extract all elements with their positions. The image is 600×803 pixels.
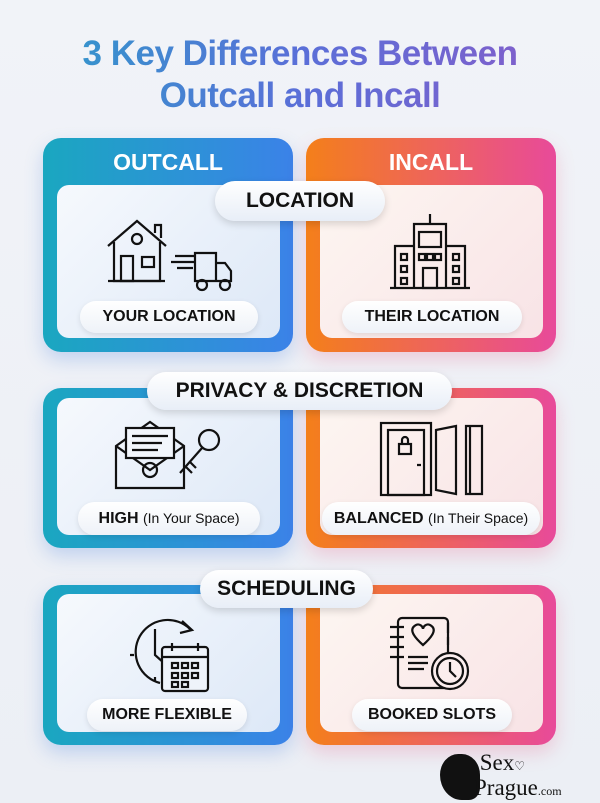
label: your location: YOUR LOCATION bbox=[102, 308, 236, 325]
panel: outcall location bbox=[43, 138, 293, 352]
icon: house and truck bbox=[107, 220, 232, 292]
pill: scheduling: SCHEDULING bbox=[217, 577, 356, 600]
panel: outcall privacy bbox=[43, 388, 293, 548]
pill: location: LOCATION bbox=[246, 189, 354, 212]
panel: incall privacy bbox=[306, 388, 556, 548]
label: your location bbox=[80, 301, 258, 333]
icon: doors bbox=[380, 422, 484, 496]
pill: scheduling bbox=[200, 570, 373, 608]
icon: notebook and clock bbox=[390, 616, 470, 690]
inner card bbox=[320, 594, 543, 732]
label: more flexible bbox=[87, 699, 247, 731]
title: 3 Key Differences Between bbox=[83, 34, 517, 73]
inner card bbox=[57, 185, 280, 338]
label: balanced bbox=[322, 502, 540, 535]
label: booked slots bbox=[352, 699, 512, 731]
panel: outcall scheduling bbox=[43, 585, 293, 745]
icon: envelope and key bbox=[114, 420, 220, 490]
label: high: HIGH (In Your Space) bbox=[99, 510, 239, 527]
inner card bbox=[320, 398, 543, 535]
panel: incall scheduling bbox=[306, 585, 556, 745]
label: more flexible: MORE FLEXIBLE bbox=[102, 706, 232, 723]
label: balanced: BALANCED (In Their Space) bbox=[334, 510, 528, 527]
icon: hair silhouette bbox=[440, 754, 480, 800]
heading: incall: INCALL bbox=[389, 149, 473, 175]
inner card bbox=[57, 594, 280, 732]
label: their location: THEIR LOCATION bbox=[365, 308, 499, 325]
logo: sexprague bbox=[440, 750, 562, 800]
logo text: Prague.com bbox=[474, 775, 562, 800]
pill: location bbox=[215, 181, 385, 221]
label: high bbox=[78, 502, 260, 535]
label: their location bbox=[342, 301, 522, 333]
panel: incall location bbox=[306, 138, 556, 352]
logo text bbox=[474, 750, 562, 800]
icon: clock and calendar bbox=[130, 618, 210, 692]
icon: building bbox=[390, 214, 470, 290]
pill: privacy: PRIVACY & DISCRETION bbox=[176, 379, 423, 402]
label: booked slots: BOOKED SLOTS bbox=[368, 706, 496, 723]
title: Outcall and Incall bbox=[160, 76, 440, 115]
inner card bbox=[57, 398, 280, 535]
logo text: Sex♡ bbox=[480, 750, 525, 775]
heading: outcall: OUTCALL bbox=[113, 149, 223, 175]
title bbox=[0, 33, 600, 117]
inner card bbox=[320, 185, 543, 338]
pill: privacy bbox=[147, 372, 452, 410]
